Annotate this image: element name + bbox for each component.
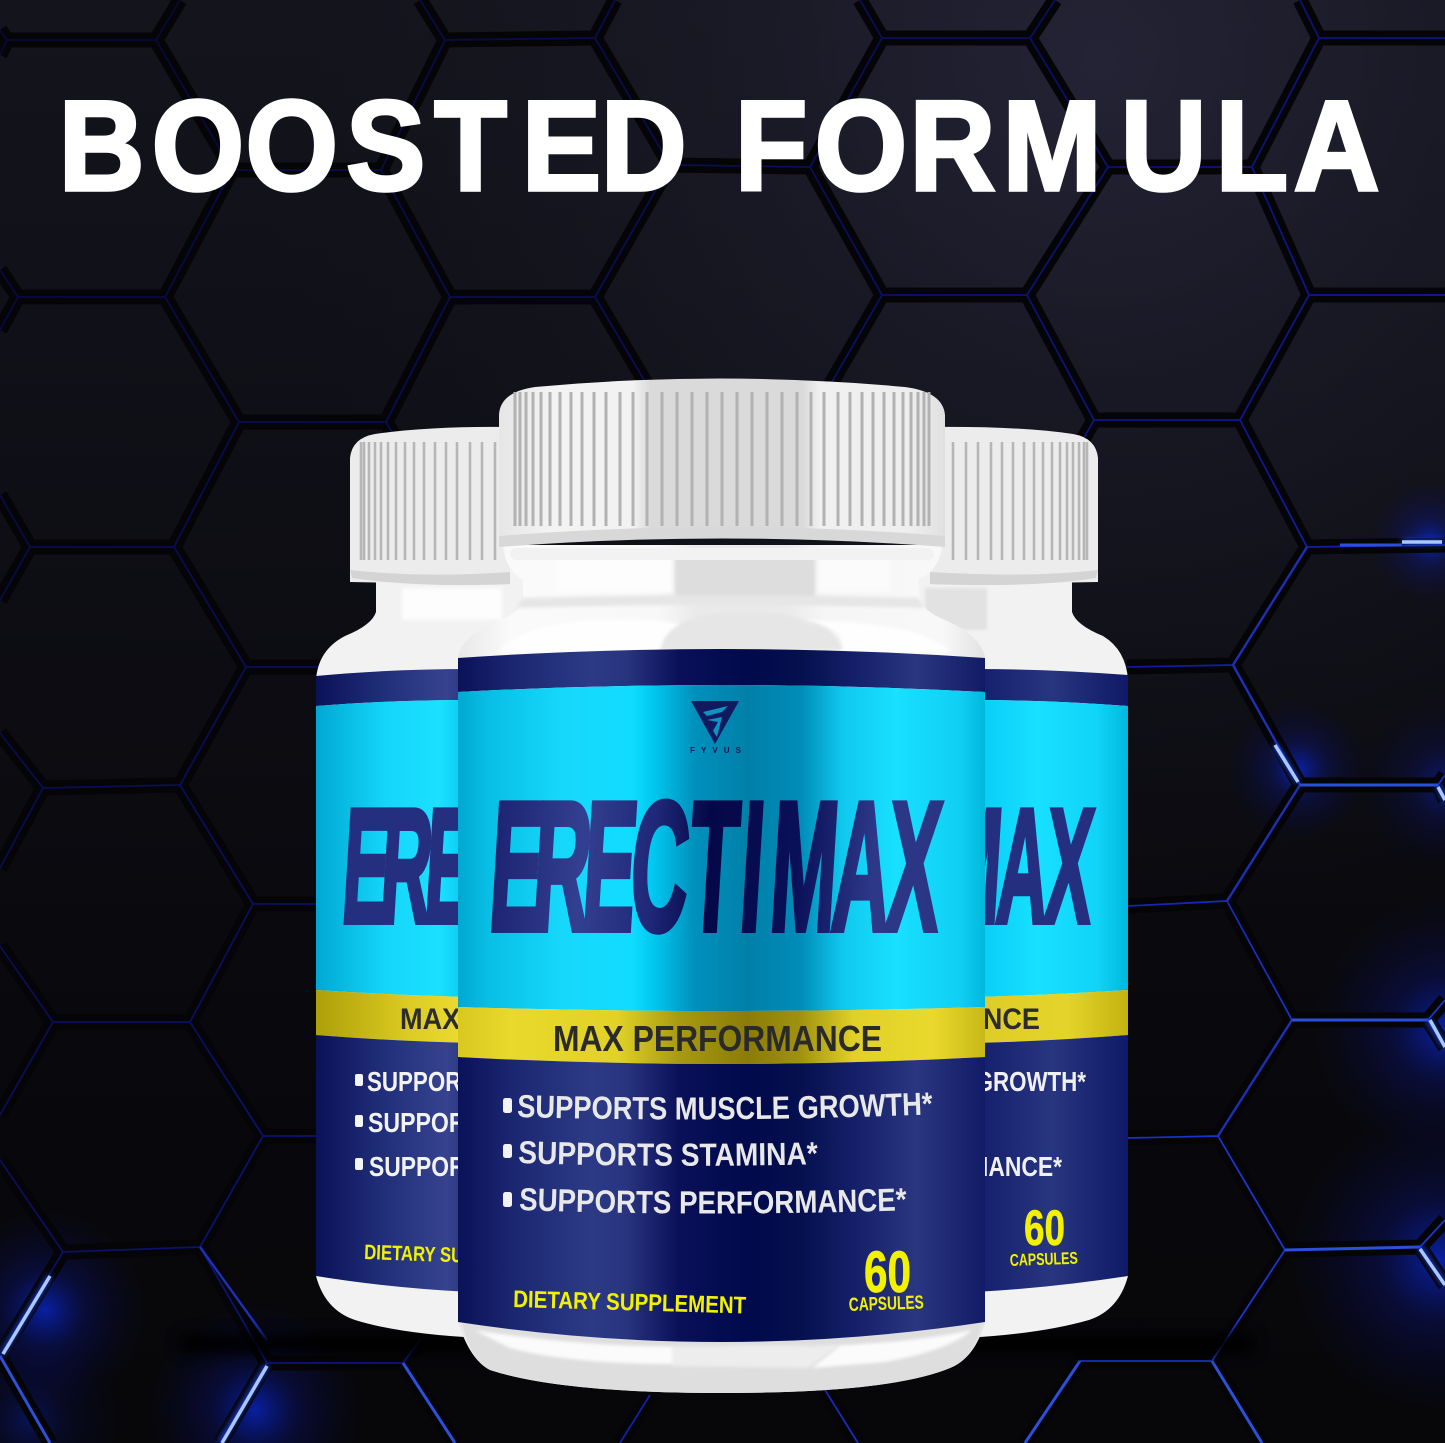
neck highlights — [498, 556, 950, 652]
right label stripes — [975, 669, 1128, 706]
label cyan panel — [458, 685, 985, 1011]
left label text: SUPPORTS STAMINA* — [368, 1107, 614, 1138]
cap ribs — [515, 392, 929, 526]
right neck shade — [925, 588, 987, 630]
base highlights — [474, 1330, 972, 1368]
capsule count: CAPSULES — [848, 1292, 924, 1316]
left bottle body — [316, 560, 540, 1338]
left label text: DIETARY SUPPLEMENT — [364, 1241, 555, 1271]
left neck highlight — [402, 588, 502, 620]
right bottle cap — [930, 427, 1098, 585]
bottle: right back — [918, 426, 1128, 1338]
label navy lower panel — [458, 1057, 985, 1342]
left label stripes — [316, 669, 470, 706]
right label text: ERECTIMAX — [689, 774, 1099, 957]
left label text — [343, 807, 458, 1262]
right bottle body — [905, 560, 1128, 1338]
cap rim — [499, 527, 945, 547]
benefit 1 — [503, 1092, 932, 1120]
right label text: MAX PERFORMANCE — [760, 1003, 1040, 1036]
logo: FYVUS — [690, 701, 742, 755]
bottle base shading — [462, 1322, 981, 1393]
benefit 3: SUPPORTS PERFORMANCE* — [520, 1188, 906, 1214]
right label text — [985, 807, 1097, 1266]
left label text: SUPPORTS MUSCLE GROWTH* — [367, 1066, 707, 1097]
front bottle body — [458, 545, 985, 1393]
benefit 2: SUPPORTS STAMINA* — [519, 1141, 818, 1166]
right label text: SUPPORTS MUSCLE GROWTH* — [746, 1066, 1086, 1097]
dietary supplement: DIETARY SUPPLEMENT — [513, 1286, 747, 1320]
floor shadow — [180, 1334, 1255, 1354]
right label text: SUPPORTS PERFORMANCE* — [742, 1151, 1062, 1182]
left bottle cap — [350, 427, 510, 585]
right label text: 60 — [1024, 1200, 1065, 1256]
left label text: ERECTIMAX — [338, 774, 748, 957]
title: BOOSTED FORMULA — [59, 75, 1380, 218]
product name: ERECTIMAX — [485, 765, 947, 970]
front bottle cap — [499, 378, 945, 545]
left label text: MAX PERFORMANCE — [400, 1003, 680, 1036]
benefit 1: SUPPORTS MUSCLE GROWTH* — [518, 1092, 932, 1120]
benefit 3 — [503, 1188, 906, 1214]
label yellow strip — [458, 1007, 985, 1064]
label navy top band — [458, 649, 985, 692]
bottle: front centre — [458, 378, 985, 1393]
benefit 2 — [503, 1141, 818, 1166]
capsule count — [848, 1240, 924, 1316]
left label text: SUPPORTS PERFORMANCE* — [369, 1151, 689, 1182]
capsule count: 60 — [864, 1240, 911, 1305]
bottle: left back — [316, 426, 523, 1337]
strip text: MAX PERFORMANCE — [553, 1018, 882, 1059]
logo: FYVUS: FYVUS — [690, 746, 742, 755]
right label text: CAPSULES — [1009, 1249, 1078, 1270]
